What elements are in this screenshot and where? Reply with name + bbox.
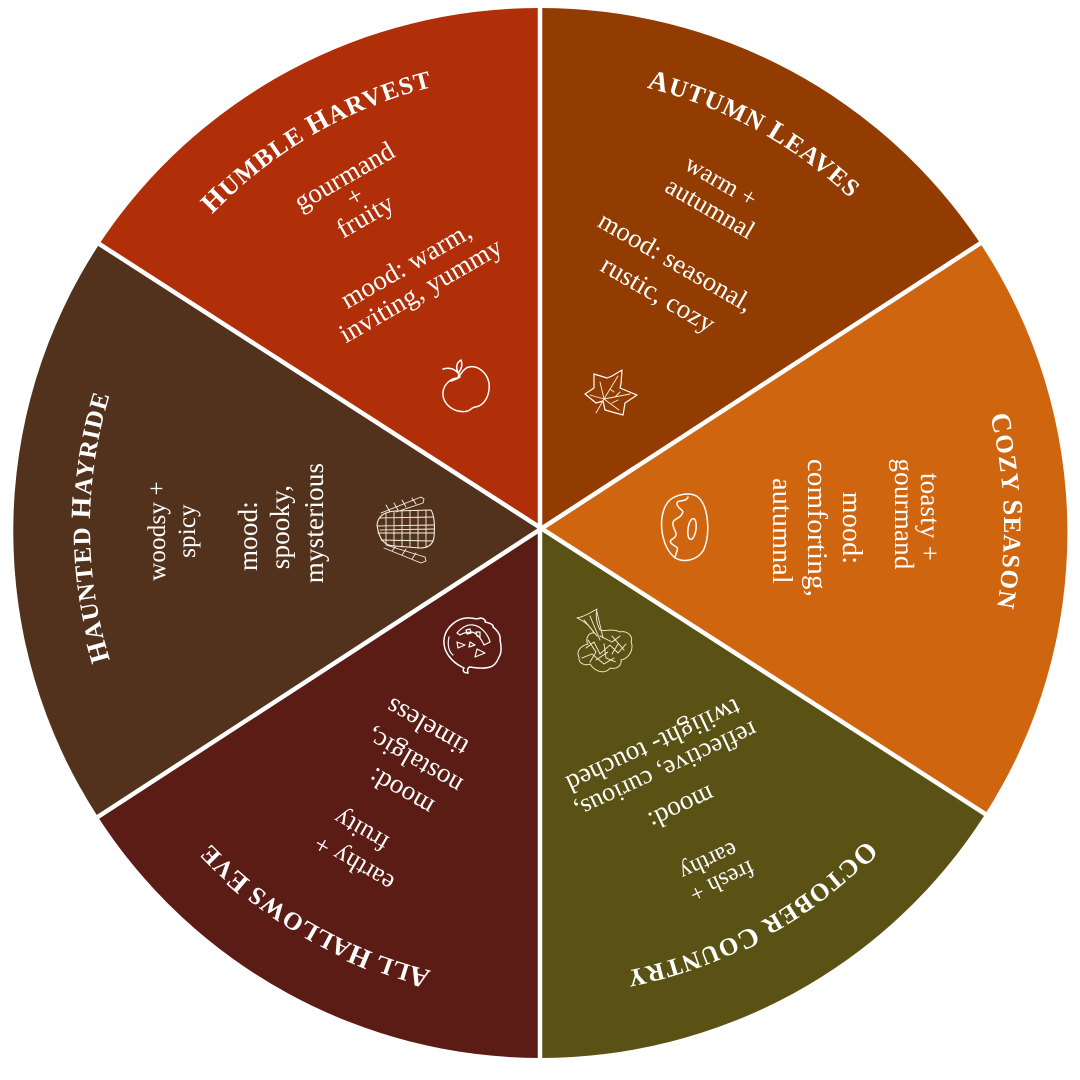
text: notes cozy season — [766, 458, 945, 597]
text: notes haunted hayride: spicy — [174, 504, 201, 558]
text: notes autumn leaves: warm + — [680, 150, 762, 213]
text: notes october country: twilight- touched — [561, 692, 745, 800]
icon: donut — [662, 494, 708, 560]
panel: haunted hayride — [13, 246, 538, 815]
text: notes all hallows eve: mood: — [363, 761, 439, 822]
text: notes haunted hayride: woodsy + — [144, 481, 171, 581]
icon: maple leaf — [585, 370, 637, 415]
text: notes october country: mood: — [643, 780, 719, 836]
text: notes cozy season: gourmand — [889, 458, 919, 570]
text: notes autumn leaves: mood: seasonal, — [593, 205, 759, 318]
text: notes all hallows eve: fruity — [328, 803, 394, 858]
sector: october country — [540, 527, 984, 1058]
panel: all hallows eve — [99, 534, 538, 1058]
heading: haunted hayride: HAUNTED HAYRIDE — [72, 393, 110, 664]
heading: humble harvest: HUMBLE HARVEST — [199, 71, 429, 214]
panel: autumn leaves — [542, 8, 979, 526]
text: notes haunted hayride: mood: — [233, 501, 263, 571]
text: notes humble harvest: inviting, yummy — [334, 231, 507, 349]
icon: flannel shirt — [377, 497, 434, 563]
icon: jack-o-lantern — [444, 618, 501, 673]
text: notes all hallows eve: nostalgic, — [360, 722, 467, 801]
sector: haunted hayride — [13, 243, 540, 817]
text: notes all hallows eve: timeless — [380, 692, 473, 763]
heading: cozy season: COZY S EASON — [992, 414, 1022, 610]
text: notes all hallows eve — [301, 691, 485, 903]
text: notes autumn leaves: rustic, cozy — [596, 249, 721, 339]
text: notes october country: reflective, curious, — [570, 715, 762, 825]
text: notes haunted hayride: mysterious — [299, 463, 329, 583]
sector: autumn leaves — [540, 8, 980, 527]
text: notes all hallows eve: earthy + — [309, 829, 399, 898]
text: notes october country: earthy — [675, 836, 741, 885]
heading: october country: OCTOBER COUNTRY — [630, 844, 876, 987]
icon: apple — [443, 360, 489, 412]
heading: all hallows eve: ALL HALLOWS EVE — [200, 844, 431, 986]
sector: all hallows eve — [98, 527, 540, 1058]
panel: cozy season — [542, 245, 1068, 816]
text: notes cozy season: toasty + — [915, 473, 945, 561]
heading: autumn leaves: AUTUMN LEAVES — [646, 72, 860, 196]
sector: cozy season — [540, 243, 1067, 816]
text: notes cozy season: comforting, — [801, 459, 833, 597]
text: notes cozy season: autumnal — [766, 478, 797, 584]
icon: broccoli tree — [577, 609, 632, 672]
text: notes october country: fresh + — [685, 854, 759, 907]
text: notes humble harvest: mood: warm, — [335, 215, 477, 314]
text: notes autumn leaves: autumnal — [661, 171, 760, 245]
text: notes haunted hayride — [144, 463, 329, 583]
sector: humble harvest — [100, 8, 540, 527]
text: notes autumn leaves — [575, 127, 804, 350]
text: notes cozy season: mood: — [836, 492, 867, 564]
text: notes october country — [558, 690, 814, 936]
text: notes humble harvest: gourmand — [289, 135, 400, 217]
text: notes humble harvest: + — [341, 179, 369, 213]
text: notes humble harvest: fruity — [331, 187, 399, 244]
text: notes haunted hayride: spooky, — [265, 485, 295, 569]
panel: october country — [542, 532, 984, 1058]
panel: humble harvest — [100, 8, 538, 524]
text: notes humble harvest — [265, 112, 507, 349]
